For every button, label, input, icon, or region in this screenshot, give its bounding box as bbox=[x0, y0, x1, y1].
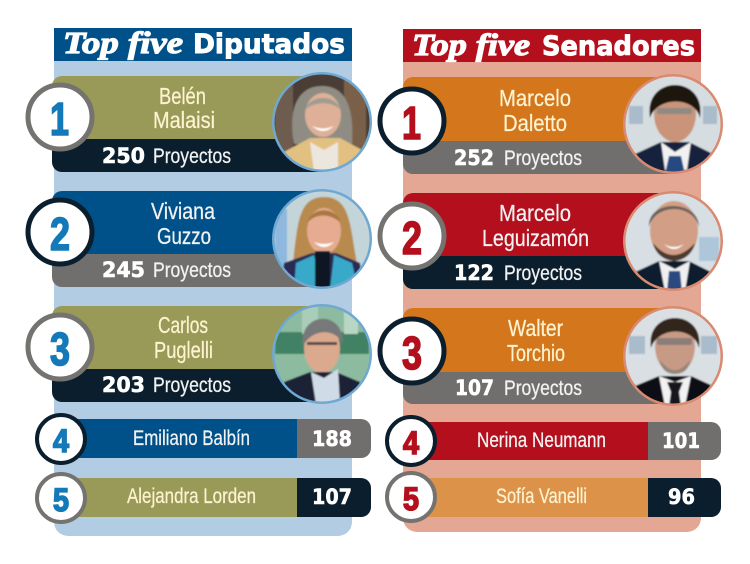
rank badge 5: 5 bbox=[53, 482, 69, 518]
heading: Top five Diputados: Top five bbox=[63, 25, 183, 60]
portrait: Marcelo Daletto bbox=[623, 74, 723, 174]
card: rank 3 Carlos Puglelli: 203 bbox=[102, 373, 145, 397]
row: rank 4 Nerina Neumann: 101 bbox=[662, 429, 700, 453]
heading: Top five Senadores bbox=[403, 27, 701, 62]
card: rank 1 Belén Malaisi: Belén bbox=[159, 83, 206, 109]
panel: Top five Diputados bbox=[28, 25, 372, 536]
card: rank 3 Walter Torchio bbox=[380, 306, 723, 406]
card: rank 2 Marcelo Leguizamón: Marcelo bbox=[499, 200, 571, 226]
rank badge 5 bbox=[387, 473, 435, 521]
portrait: Viviana Guzzo bbox=[272, 189, 372, 289]
card: rank 3 Carlos Puglelli: Puglelli bbox=[154, 337, 213, 363]
card: rank 2 Marcelo Leguizamón: Proyectos bbox=[504, 262, 582, 285]
card: rank 1 Marcelo Daletto bbox=[380, 74, 723, 174]
rank badge 2: 2 bbox=[50, 208, 70, 260]
card: rank 3 Carlos Puglelli bbox=[28, 304, 372, 404]
card: rank 1 Marcelo Daletto: Marcelo bbox=[499, 85, 571, 111]
card: rank 1 Belén Malaisi: Malaisi bbox=[153, 107, 215, 133]
panel: Top five Senadores bbox=[380, 27, 723, 532]
rank badge 4: 4 bbox=[403, 425, 419, 461]
card: rank 2 Marcelo Leguizamón bbox=[380, 191, 723, 291]
rank badge 3: 3 bbox=[402, 327, 422, 379]
rank badge 4: 4 bbox=[53, 423, 69, 459]
rank badge 5: 5 bbox=[403, 481, 419, 517]
row: rank 4 Nerina Neumann bbox=[387, 417, 721, 465]
rank badge 3: 3 bbox=[50, 323, 70, 375]
rank badge 1: 1 bbox=[402, 97, 421, 149]
row: rank 5 Sofía Vanelli: 96 bbox=[668, 485, 695, 509]
portrait: Walter Torchio bbox=[623, 306, 723, 406]
row: rank 4 Nerina Neumann: Nerina Neumann bbox=[477, 429, 606, 452]
rank badge 2: 2 bbox=[402, 212, 422, 264]
rank badge 1: 1 bbox=[50, 93, 69, 145]
rank badge 1 bbox=[380, 89, 444, 153]
rank badge 3 bbox=[28, 315, 92, 379]
rank badge 2 bbox=[28, 200, 92, 264]
rank badge 5 bbox=[37, 474, 85, 522]
heading: Top five Senadores: Top five bbox=[412, 27, 530, 62]
card: rank 3 Carlos Puglelli: Proyectos bbox=[153, 374, 231, 397]
rank badge 4 bbox=[387, 417, 435, 465]
card: rank 3 Walter Torchio: 107 bbox=[455, 376, 494, 400]
portrait: Carlos Puglelli bbox=[272, 304, 372, 404]
row: rank 4 Emiliano Balbín: Emiliano Balbín bbox=[133, 427, 250, 450]
row: rank 5 Alejandra Lorden: Alejandra Lorden bbox=[127, 485, 256, 508]
portrait: Belén Malaisi bbox=[272, 72, 372, 172]
card: rank 3 Walter Torchio: Walter bbox=[508, 315, 563, 341]
rank badge 4 bbox=[37, 415, 85, 463]
card: rank 2 Viviana Guzzo: 245 bbox=[102, 258, 145, 282]
row: rank 4 Emiliano Balbín: 188 bbox=[312, 427, 352, 451]
card: rank 2 Viviana Guzzo bbox=[28, 189, 372, 289]
card: rank 2 Marcelo Leguizamón: Leguizamón bbox=[482, 225, 589, 251]
card: rank 1 Belén Malaisi: Proyectos bbox=[153, 145, 231, 168]
card: rank 1 Belén Malaisi: 250 bbox=[102, 144, 145, 168]
card: rank 1 Marcelo Daletto: Proyectos bbox=[504, 147, 582, 170]
rank badge 1 bbox=[28, 85, 92, 149]
rank badge 3 bbox=[380, 319, 444, 383]
card: rank 3 Walter Torchio: Proyectos bbox=[504, 377, 582, 400]
card: rank 2 Marcelo Leguizamón: 122 bbox=[454, 261, 494, 285]
card: rank 1 Belén Malaisi bbox=[28, 72, 372, 172]
portrait: Marcelo Leguizamón bbox=[623, 191, 723, 291]
row: rank 5 Sofía Vanelli: Sofía Vanelli bbox=[496, 485, 587, 508]
row: rank 4 Emiliano Balbín bbox=[37, 415, 371, 463]
card: rank 3 Carlos Puglelli: Carlos bbox=[158, 312, 208, 338]
row: rank 5 Alejandra Lorden bbox=[37, 474, 371, 522]
heading: Top five Diputados: Diputados bbox=[193, 29, 345, 60]
card: rank 1 Marcelo Daletto: 252 bbox=[454, 146, 494, 170]
row: rank 5 Sofía Vanelli bbox=[387, 473, 721, 521]
card: rank 1 Marcelo Daletto: Daletto bbox=[503, 110, 567, 136]
card: rank 2 Viviana Guzzo: Guzzo bbox=[157, 223, 211, 249]
rank badge 2 bbox=[380, 204, 444, 268]
card: rank 2 Viviana Guzzo: Viviana bbox=[151, 198, 215, 224]
card: rank 3 Walter Torchio: Torchio bbox=[507, 340, 565, 366]
card: rank 2 Viviana Guzzo: Proyectos bbox=[153, 259, 231, 282]
heading: Top five Senadores: Senadores bbox=[542, 31, 695, 62]
row: rank 5 Alejandra Lorden: 107 bbox=[312, 485, 352, 509]
heading: Top five Diputados bbox=[54, 25, 352, 61]
